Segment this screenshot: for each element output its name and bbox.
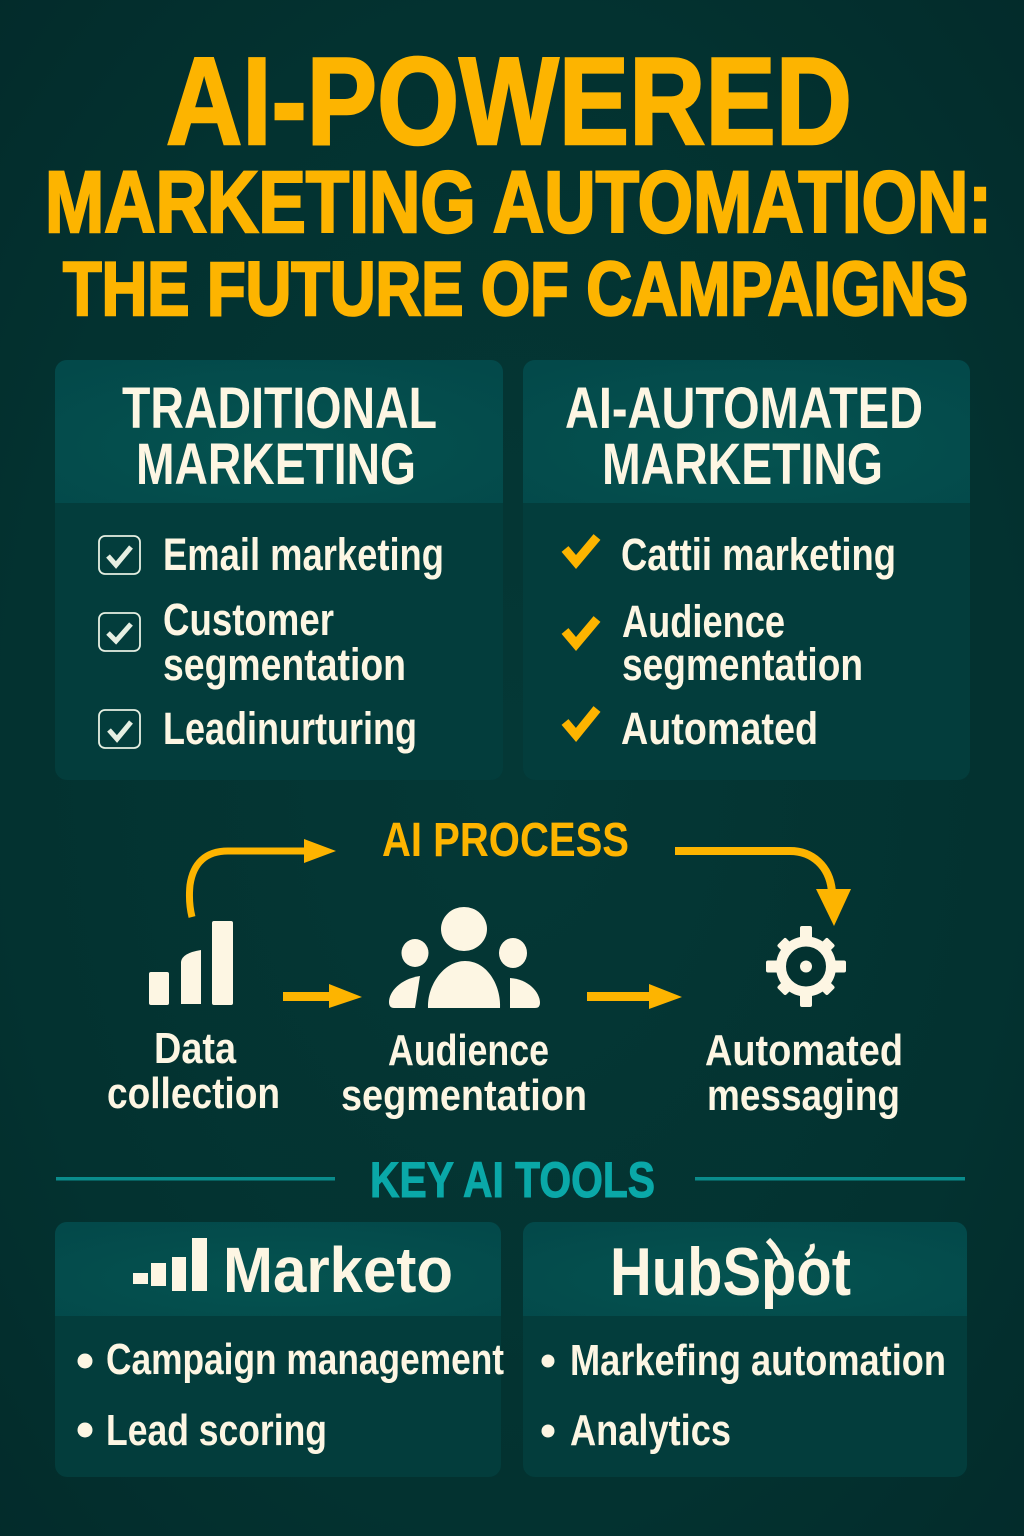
panel: marketo	[55, 1222, 504, 1477]
list: traditional items: Leadinurturing	[163, 703, 417, 754]
list: ai-automated items	[621, 529, 896, 754]
heading: traditional marketing: MARKETING	[136, 432, 416, 497]
labels: process steps: messaging	[707, 1071, 900, 1120]
icons: orange checks	[565, 537, 597, 735]
arrow: process to messaging	[675, 851, 851, 926]
list: ai-automated items: Audience	[622, 596, 785, 647]
list: hubspot features: Analytics	[570, 1406, 731, 1455]
heading: traditional marketing: TRADITIONAL	[122, 376, 437, 441]
heading: key ai tools	[56, 1152, 965, 1208]
panel: traditional marketing	[55, 360, 503, 780]
heading: key ai tools: KEY AI TOOLS	[370, 1152, 655, 1208]
arrow: data to process	[189, 839, 336, 917]
heading: ai-automated marketing	[565, 376, 923, 497]
title	[45, 33, 992, 332]
labels: process steps: Audience	[388, 1026, 549, 1075]
list: ai-automated items: segmentation	[622, 639, 863, 690]
icon: audience group	[389, 907, 540, 1008]
arrow: data to audience	[283, 984, 362, 1008]
list: marketo features: Campaign management	[106, 1335, 504, 1384]
list: traditional items: segmentation	[163, 639, 406, 690]
list: ai-automated items: Automated	[621, 703, 818, 754]
list: traditional items: Customer	[163, 594, 334, 645]
list: ai-automated items: Cattii marketing	[621, 529, 896, 580]
labels: process steps: segmentation	[341, 1071, 587, 1120]
icon: gear	[766, 926, 846, 1007]
labels: process steps: collection	[107, 1069, 280, 1118]
list: hubspot features: Markefing automation	[570, 1336, 946, 1385]
labels: process steps: Data	[154, 1024, 236, 1073]
icon: bar chart	[149, 921, 233, 1005]
heading: ai process: AI PROCESS	[382, 814, 629, 867]
list: traditional items	[163, 529, 444, 754]
heading: ai-automated marketing: AI-AUTOMATED	[565, 376, 923, 441]
panel: ai-automated marketing	[523, 360, 970, 780]
logo: hubspot: HubSpot	[610, 1234, 851, 1310]
list: hubspot features	[542, 1336, 946, 1455]
icons: checkboxes	[99, 536, 140, 748]
arrow: audience to messaging	[587, 984, 682, 1009]
heading: ai-automated marketing: MARKETING	[602, 432, 883, 497]
heading: traditional marketing	[122, 376, 437, 497]
list: traditional items: Email marketing	[163, 529, 444, 580]
panel: hubspot	[523, 1222, 967, 1477]
labels: process steps	[107, 1024, 903, 1120]
title: AI-POWERED	[166, 33, 852, 171]
logo: marketo	[133, 1234, 453, 1306]
logo: marketo: Marketo	[223, 1234, 453, 1306]
labels: process steps: Automated	[705, 1026, 903, 1075]
list: marketo features	[78, 1335, 504, 1455]
list: marketo features: Lead scoring	[106, 1406, 327, 1455]
